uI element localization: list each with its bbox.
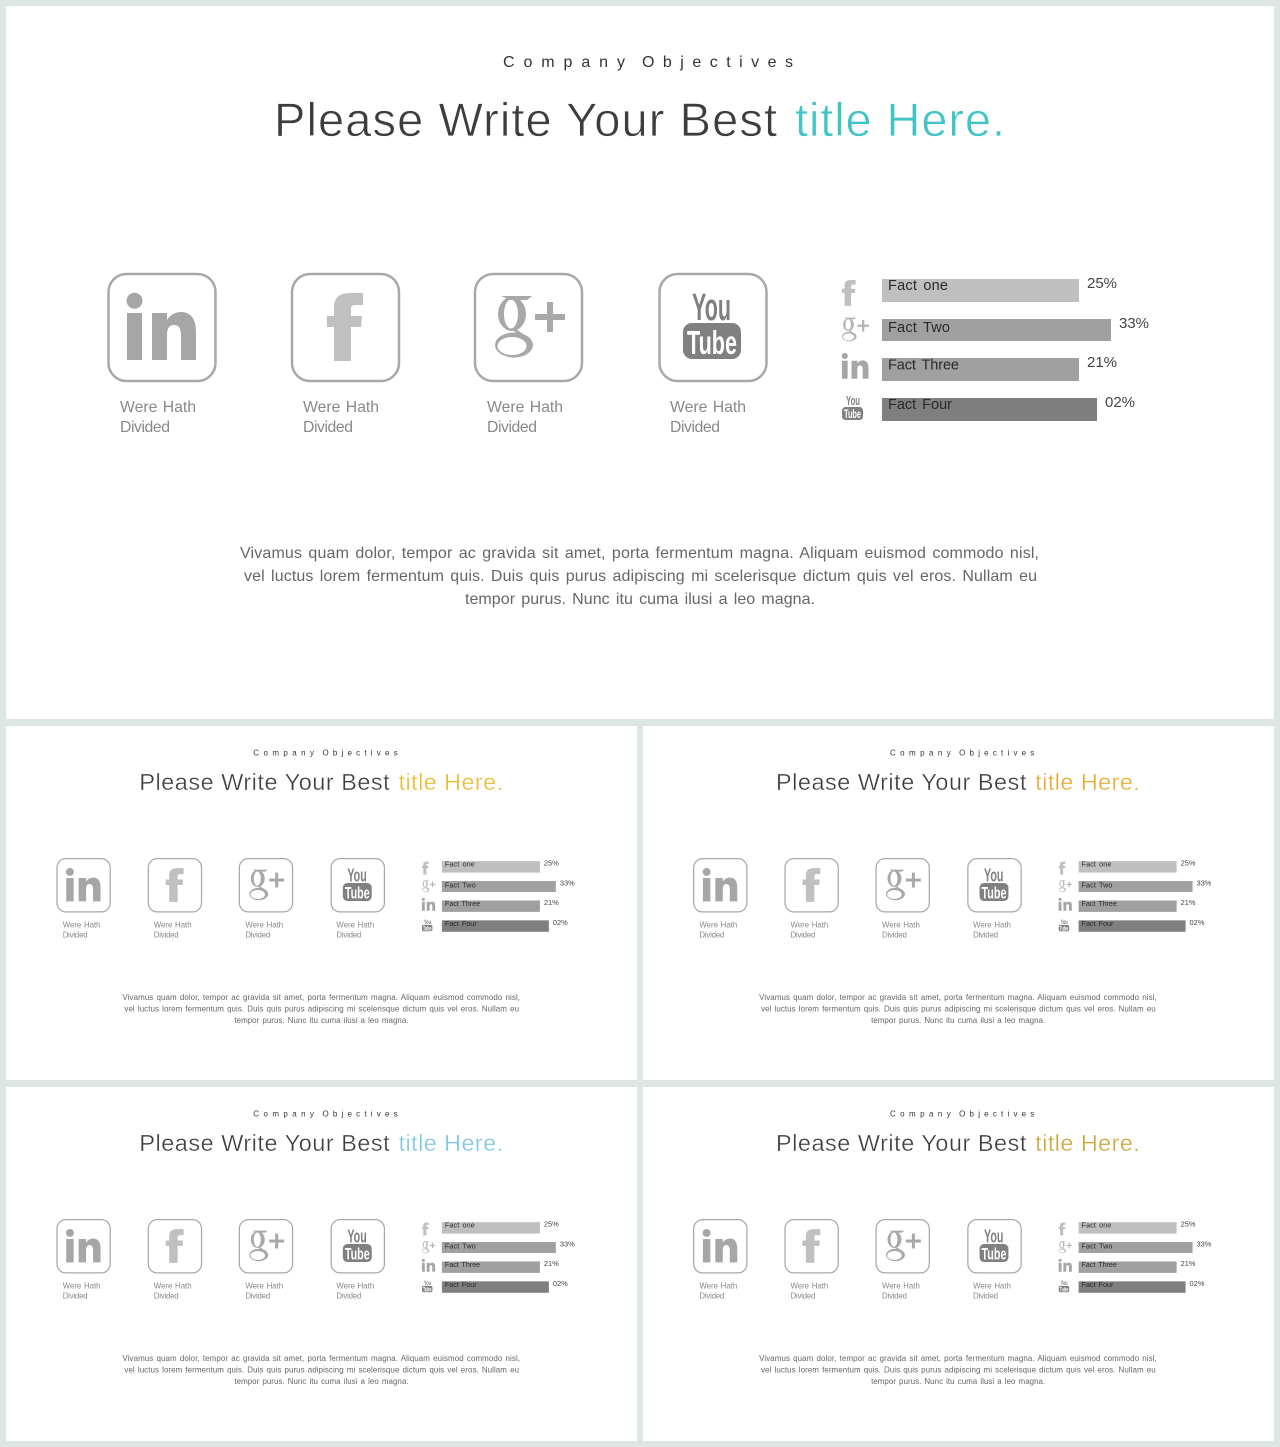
icon labels: Divided bbox=[670, 419, 720, 436]
body text: vel luctus lorem fermentum quis. Duis quis purus adipiscing mi scelerisque dictum quis vel eros. Nullam eu bbox=[244, 568, 1037, 585]
body text bbox=[122, 1354, 520, 1386]
bar chart: Tube bbox=[423, 926, 432, 932]
title: Please Write Your Best bbox=[139, 1130, 390, 1156]
bar chart: 02% bbox=[553, 1279, 568, 1288]
title: Please Write Your Best bbox=[776, 1130, 1027, 1156]
icon labels bbox=[63, 1281, 374, 1300]
bar chart: You bbox=[1061, 919, 1068, 926]
bar chart: Tube bbox=[423, 1287, 432, 1293]
kicker: Company bbox=[253, 1110, 314, 1119]
bar chart: 25% bbox=[1087, 275, 1117, 292]
icon labels bbox=[699, 920, 1011, 939]
bar chart: Fact one bbox=[1082, 860, 1111, 869]
kicker: Company bbox=[253, 749, 314, 758]
bar chart bbox=[422, 1220, 575, 1293]
body text bbox=[122, 993, 520, 1025]
icon labels: Were Hath bbox=[245, 920, 283, 929]
bar chart: 02% bbox=[1190, 918, 1205, 927]
bar chart: Tube bbox=[1060, 926, 1069, 932]
body text bbox=[759, 993, 1157, 1025]
panel: slide yellow bbox=[6, 726, 637, 1080]
icon: google plus bbox=[475, 274, 582, 381]
bar chart bbox=[1059, 859, 1212, 932]
bar chart: Fact Two bbox=[445, 881, 476, 890]
bar chart: Fact Two bbox=[1082, 881, 1112, 890]
bar chart bbox=[422, 859, 575, 932]
bar chart: 33% bbox=[1197, 1240, 1212, 1249]
icon labels: Divided bbox=[790, 930, 815, 939]
icon labels: Divided bbox=[120, 419, 170, 436]
icon labels: Divided bbox=[699, 930, 724, 939]
bar chart: Fact one bbox=[1082, 1221, 1111, 1230]
icon: youtube: Tube bbox=[687, 324, 737, 361]
kicker: Company bbox=[890, 749, 951, 758]
body text bbox=[240, 545, 1039, 608]
icon labels: Were Hath bbox=[487, 399, 563, 416]
icon labels: Were Hath bbox=[973, 920, 1011, 929]
icon labels: Divided bbox=[245, 1291, 270, 1300]
bar chart: Fact Three bbox=[1082, 899, 1117, 908]
panel: slide blue bbox=[6, 1087, 637, 1441]
body text: tempor purus. Nunc itu cuma ilusi a leo magna. bbox=[871, 1016, 1045, 1025]
icon: facebook bbox=[148, 1220, 202, 1273]
icon: youtube: Tube bbox=[345, 884, 370, 902]
bar chart: You bbox=[424, 1280, 431, 1287]
panel: slide gold bbox=[643, 1087, 1274, 1441]
body text: tempor purus. Nunc itu cuma ilusi a leo magna. bbox=[234, 1016, 409, 1025]
bar chart: Tube bbox=[844, 407, 861, 421]
icon labels: Were Hath bbox=[973, 1281, 1011, 1290]
icon: youtube: Tube bbox=[982, 1245, 1006, 1263]
icon labels: Were Hath bbox=[154, 1281, 192, 1290]
icon labels: Were Hath bbox=[670, 399, 746, 416]
body text: Vivamus quam dolor, tempor ac gravida sit amet, porta fermentum magna. Aliquam euismod commodo nisl, bbox=[759, 993, 1157, 1002]
bar chart: 21% bbox=[544, 898, 559, 907]
body text bbox=[759, 1354, 1157, 1386]
bar chart bbox=[842, 275, 1149, 421]
body text: tempor purus. Nunc itu cuma ilusi a leo magna. bbox=[465, 591, 815, 608]
title: title Here. bbox=[399, 769, 503, 795]
bar chart: Fact Four bbox=[1082, 1280, 1114, 1289]
bar chart: Fact Three bbox=[1082, 1260, 1117, 1269]
body text: vel luctus lorem fermentum quis. Duis quis purus adipiscing mi scelerisque dictum quis vel eros. Nullam eu bbox=[124, 1365, 519, 1374]
icon labels bbox=[120, 399, 746, 436]
bar chart: Fact Three bbox=[888, 358, 959, 374]
icon labels: Were Hath bbox=[245, 1281, 283, 1290]
icon labels: Were Hath bbox=[699, 920, 737, 929]
panel: main slide bbox=[6, 6, 1274, 719]
bar chart: 21% bbox=[1087, 354, 1117, 371]
kicker: Company bbox=[890, 1110, 951, 1119]
bar chart: Fact Three bbox=[445, 1260, 480, 1269]
bar chart: Fact Two bbox=[1082, 1242, 1112, 1251]
icon labels: Divided bbox=[154, 1291, 179, 1300]
icon: linkedin bbox=[694, 1220, 747, 1273]
kicker: Objectives bbox=[322, 1110, 398, 1119]
bar chart: 02% bbox=[1105, 394, 1135, 411]
icon: facebook bbox=[785, 1220, 838, 1273]
icon labels bbox=[699, 1281, 1011, 1300]
title: Please Write Your Best bbox=[139, 769, 390, 795]
bar chart: 25% bbox=[1181, 859, 1196, 868]
icon labels: Divided bbox=[882, 1291, 907, 1300]
bar chart bbox=[1059, 1220, 1212, 1293]
icon labels: Were Hath bbox=[336, 920, 374, 929]
icon: youtube bbox=[331, 1220, 384, 1273]
icon labels: Divided bbox=[245, 930, 270, 939]
kicker: Company bbox=[503, 54, 625, 71]
body text: Vivamus quam dolor, tempor ac gravida sit amet, porta fermentum magna. Aliquam euismod commodo nisl, bbox=[122, 1354, 520, 1363]
icon: google plus bbox=[239, 859, 293, 912]
bar chart: Fact Four bbox=[888, 397, 952, 413]
icon: google plus bbox=[876, 859, 929, 912]
bar chart: Fact one bbox=[445, 860, 475, 869]
icon labels: Were Hath bbox=[154, 920, 192, 929]
kicker: Objectives bbox=[322, 749, 398, 758]
icon: youtube: You bbox=[984, 1227, 1003, 1248]
kicker: Objectives bbox=[642, 54, 793, 71]
title: title Here. bbox=[795, 93, 1005, 146]
icon: youtube: Tube bbox=[345, 1245, 370, 1263]
icon: linkedin bbox=[57, 1220, 110, 1273]
panel: slide orange bbox=[643, 726, 1274, 1080]
icon labels: Were Hath bbox=[303, 399, 379, 416]
icon labels: Were Hath bbox=[882, 920, 920, 929]
body text: Vivamus quam dolor, tempor ac gravida sit amet, porta fermentum magna. Aliquam euismod commodo nisl, bbox=[122, 993, 520, 1002]
bar chart: Fact Two bbox=[445, 1242, 476, 1251]
bar chart: Fact Four bbox=[445, 1280, 477, 1289]
bar chart: Fact one bbox=[445, 1221, 475, 1230]
bar chart: You bbox=[846, 393, 860, 408]
body text: vel luctus lorem fermentum quis. Duis quis purus adipiscing mi scelerisque dictum quis vel eros. Nullam eu bbox=[124, 1004, 519, 1013]
icon: youtube bbox=[968, 1220, 1021, 1273]
icon labels: Divided bbox=[973, 930, 998, 939]
bar chart: Fact Four bbox=[445, 919, 477, 928]
icon labels: Divided bbox=[487, 419, 537, 436]
title: Please Write Your Best bbox=[274, 93, 777, 146]
body text: Vivamus quam dolor, tempor ac gravida sit amet, porta fermentum magna. Aliquam euismod commodo nisl, bbox=[759, 1354, 1157, 1363]
icon labels: Were Hath bbox=[699, 1281, 737, 1290]
icon labels: Divided bbox=[63, 930, 88, 939]
title: Please Write Your Best bbox=[776, 769, 1027, 795]
icon: youtube: Tube bbox=[982, 884, 1006, 902]
icon labels: Divided bbox=[973, 1291, 998, 1300]
bar chart: 25% bbox=[1181, 1220, 1196, 1229]
icon: youtube: You bbox=[692, 287, 731, 329]
body text: tempor purus. Nunc itu cuma ilusi a leo magna. bbox=[871, 1377, 1045, 1386]
bar chart: You bbox=[1061, 1280, 1068, 1287]
icon labels: Divided bbox=[790, 1291, 815, 1300]
kicker: Objectives bbox=[959, 1110, 1034, 1119]
icon: linkedin bbox=[57, 859, 110, 912]
icon: youtube bbox=[331, 859, 384, 912]
bar chart: 02% bbox=[1190, 1279, 1205, 1288]
bar chart: 02% bbox=[553, 918, 568, 927]
icon: youtube: You bbox=[347, 866, 367, 887]
icon labels: Divided bbox=[336, 930, 361, 939]
body text: tempor purus. Nunc itu cuma ilusi a leo magna. bbox=[234, 1377, 409, 1386]
bar chart: 21% bbox=[1181, 898, 1196, 907]
bar chart: 21% bbox=[1181, 1259, 1196, 1268]
icon: google plus bbox=[876, 1220, 929, 1273]
icon labels: Divided bbox=[336, 1291, 361, 1300]
bar chart: 25% bbox=[544, 859, 559, 868]
bar chart: 25% bbox=[544, 1220, 559, 1229]
icon labels: Were Hath bbox=[63, 920, 101, 929]
icon labels: Were Hath bbox=[790, 1281, 828, 1290]
icon labels: Were Hath bbox=[882, 1281, 920, 1290]
icon: facebook bbox=[148, 859, 202, 912]
icon: google plus bbox=[239, 1220, 293, 1273]
body text: Vivamus quam dolor, tempor ac gravida sit amet, porta fermentum magna. Aliquam euismod commodo nisl, bbox=[240, 545, 1039, 562]
title: title Here. bbox=[399, 1130, 503, 1156]
icon: youtube: You bbox=[347, 1227, 367, 1248]
bar chart: Fact Three bbox=[445, 899, 480, 908]
bar chart: 33% bbox=[560, 879, 575, 888]
icon labels: Divided bbox=[154, 930, 179, 939]
icon labels: Divided bbox=[303, 419, 353, 436]
title: title Here. bbox=[1035, 1130, 1140, 1156]
bar chart: Fact Two bbox=[888, 320, 950, 336]
icon: facebook bbox=[785, 859, 838, 912]
body text: vel luctus lorem fermentum quis. Duis quis purus adipiscing mi scelerisque dictum quis vel eros. Nullam eu bbox=[761, 1004, 1156, 1013]
bar chart: 33% bbox=[560, 1240, 575, 1249]
icon: youtube: You bbox=[984, 866, 1003, 887]
bar chart: 33% bbox=[1119, 315, 1149, 332]
icon labels: Divided bbox=[882, 930, 907, 939]
kicker: Objectives bbox=[959, 749, 1034, 758]
title: title Here. bbox=[1035, 769, 1140, 795]
bar chart: You bbox=[424, 919, 431, 926]
icon labels: Were Hath bbox=[120, 399, 196, 416]
icon labels: Divided bbox=[699, 1291, 724, 1300]
bar chart: 21% bbox=[544, 1259, 559, 1268]
icon: linkedin bbox=[108, 274, 216, 381]
bar chart: Fact Four bbox=[1082, 919, 1114, 928]
icon: facebook bbox=[292, 274, 399, 381]
icon: youtube bbox=[968, 859, 1021, 912]
icon labels: Were Hath bbox=[336, 1281, 374, 1290]
icon labels: Were Hath bbox=[790, 920, 828, 929]
icon labels: Were Hath bbox=[63, 1281, 101, 1290]
bar chart: Fact one bbox=[888, 278, 948, 294]
bar chart: Tube bbox=[1060, 1287, 1069, 1293]
bar chart: 33% bbox=[1197, 879, 1212, 888]
icon labels: Divided bbox=[63, 1291, 88, 1300]
icon: linkedin bbox=[694, 859, 747, 912]
icon labels bbox=[63, 920, 374, 939]
body text: vel luctus lorem fermentum quis. Duis quis purus adipiscing mi scelerisque dictum quis vel eros. Nullam eu bbox=[761, 1365, 1156, 1374]
icon: youtube bbox=[660, 274, 766, 381]
